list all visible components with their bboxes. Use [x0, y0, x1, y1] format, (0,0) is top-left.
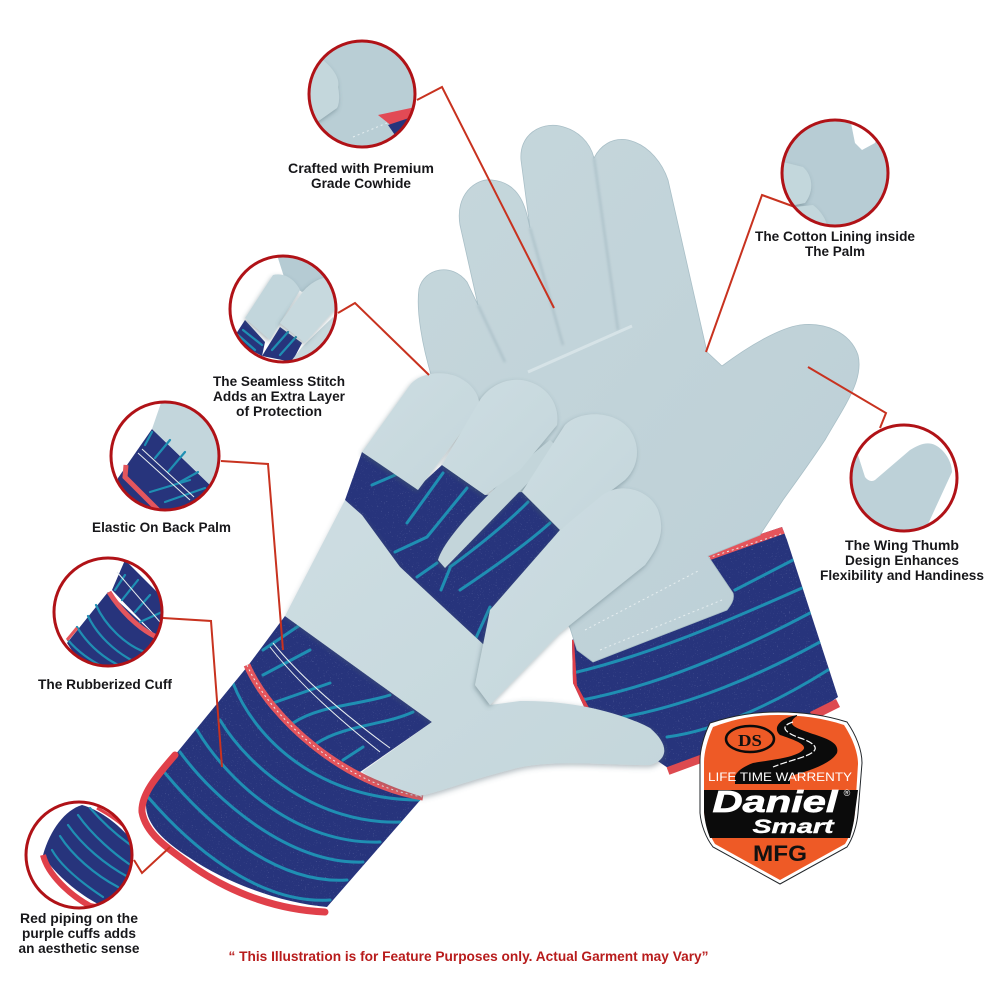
callout circle: wing thumb	[845, 424, 960, 535]
label: cotton lining: The Palm	[805, 244, 865, 259]
front glove cuff with stripes	[140, 660, 430, 915]
road	[735, 715, 837, 784]
label: wing thumb: Flexibility and Handiness	[820, 568, 984, 583]
label: seamless stitch: of Protection	[236, 404, 322, 419]
back glove palm stitching	[528, 326, 722, 650]
label: cowhide: Grade Cowhide	[311, 176, 411, 191]
MFG wordmark: MFG	[753, 841, 807, 866]
label: seamless stitch: Adds an Extra Layer	[213, 389, 346, 404]
shield outline	[700, 712, 862, 884]
wrist seam red piping	[247, 665, 423, 797]
leader lines	[134, 87, 886, 873]
front glove palm and thumb	[285, 500, 664, 796]
Daniel wordmark: Daniel	[712, 784, 839, 819]
wrist elastic fabric	[249, 616, 432, 772]
callout circle: seamless stitch	[228, 254, 340, 364]
callout circle: cotton lining	[775, 118, 890, 228]
label: wing thumb: The Wing Thumb	[845, 538, 959, 553]
disclaimer note: “ This Illustration is for Feature Purposes only. Actual Garment may Vary”	[228, 949, 708, 964]
shield orange field	[704, 715, 858, 880]
callout circle: rubberized cuff	[54, 558, 165, 670]
logo badge: Daniel Smart MFG	[700, 712, 862, 884]
label: cotton lining: The Cotton Lining inside	[755, 229, 915, 244]
label: seamless stitch: The Seamless Stitch	[213, 374, 345, 389]
back glove palm, fingers and wing thumb silhouette	[418, 125, 859, 662]
DS emblem	[726, 726, 774, 752]
lifetime warranty text: LIFE TIME WARRENTY	[708, 770, 852, 784]
black band	[704, 790, 858, 838]
finger fabric	[340, 450, 565, 650]
back glove finger creases	[478, 158, 618, 362]
label: elastic: Elastic On Back Palm	[92, 520, 231, 535]
back glove (palm view)	[418, 125, 859, 780]
cuff red piping, bottom	[142, 755, 325, 912]
label: red piping: purple cuffs adds	[22, 926, 136, 941]
front glove (back-of-hand view)	[140, 373, 664, 915]
label: wing thumb: Design Enhances	[845, 553, 959, 568]
registered mark: ®	[844, 788, 851, 798]
label: rubberized cuff: The Rubberized Cuff	[38, 677, 173, 692]
Smart wordmark: Smart	[752, 817, 835, 838]
callout circle: red piping	[24, 800, 135, 910]
DS emblem: DS	[738, 731, 762, 750]
back glove cuff	[572, 527, 840, 775]
callout circle: elastic	[110, 400, 225, 515]
front glove fingers	[362, 373, 661, 705]
callout circle: cowhide	[308, 40, 416, 148]
label: red piping: an aesthetic sense	[18, 941, 140, 956]
label: cowhide: Crafted with Premium	[288, 161, 434, 176]
label: red piping: Red piping on the	[20, 911, 138, 926]
